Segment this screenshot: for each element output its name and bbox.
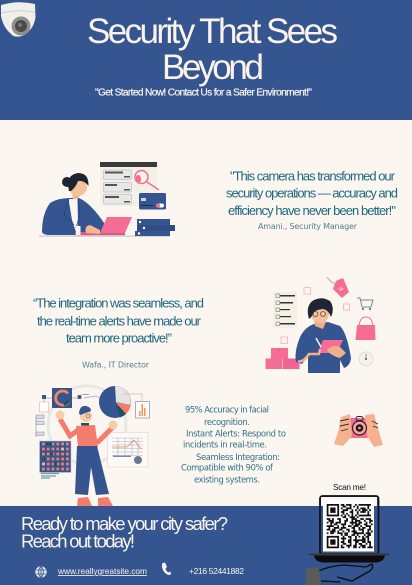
key facts text: [181, 404, 286, 484]
subtitle: "Get Started Now! Contact Us for a Safer Environment!": [95, 88, 312, 98]
testimonial: Wafa: the real-time alerts have made our: [37, 314, 202, 328]
key facts text: existing systems.: [194, 474, 260, 484]
QR code on tray held by hand: [306, 496, 389, 585]
title: [87, 12, 338, 87]
tray: [309, 553, 389, 562]
title: Security That Sees: [87, 12, 338, 51]
testimonial: Wafa: team more proactive!”: [66, 330, 172, 346]
testimonial: Wafa: [33, 296, 204, 370]
hand outline: [318, 564, 373, 582]
phone number: +216 52441882: [189, 566, 244, 576]
call to action: Ready to make your city safer?: [21, 513, 228, 534]
key facts text: incidents in real-time.: [183, 440, 267, 450]
website link: www.reallygreatsite.com: [57, 566, 147, 576]
key facts text: Seamless Integration:: [196, 452, 280, 462]
testimonial: Amani: Amani., Security Manager: [258, 222, 358, 231]
key facts text: Instant Alerts: Respond to: [186, 428, 286, 438]
icon: phone: [162, 562, 171, 575]
QR pattern: [327, 505, 373, 547]
icon: globe: [36, 567, 46, 577]
icon: hands holding pink camera: [334, 414, 383, 447]
header band: [0, 0, 412, 120]
testimonial: Wafa: “The integration was seamless, and: [33, 296, 204, 310]
testimonial: Wafa: Wafa., IT Director: [82, 360, 150, 370]
testimonial: Amani: efficiency have never been better!": [228, 203, 396, 218]
scan me label: Scan me!: [333, 482, 366, 492]
key facts text: recognition.: [204, 417, 250, 427]
illustration: man with clipboard and shopping items: [266, 277, 376, 373]
title: Beyond: [162, 48, 264, 87]
icon: dome security camera: [1, 2, 36, 37]
sleeve: [306, 567, 321, 585]
testimonial: Amani: [226, 168, 398, 231]
call to action: Reach out today!: [21, 530, 135, 552]
footer band: [0, 506, 412, 585]
illustration: analyst with charts: [36, 386, 150, 506]
call to action: [21, 513, 228, 552]
testimonial: Amani: security operations — accuracy and: [226, 186, 398, 200]
testimonial: Amani: "This camera has transformed our: [230, 168, 396, 184]
key facts text: Compatible with 90% of: [181, 462, 274, 472]
illustration: woman working at laptop: [39, 162, 175, 237]
key facts text: 95% Accuracy in facial: [185, 404, 269, 414]
